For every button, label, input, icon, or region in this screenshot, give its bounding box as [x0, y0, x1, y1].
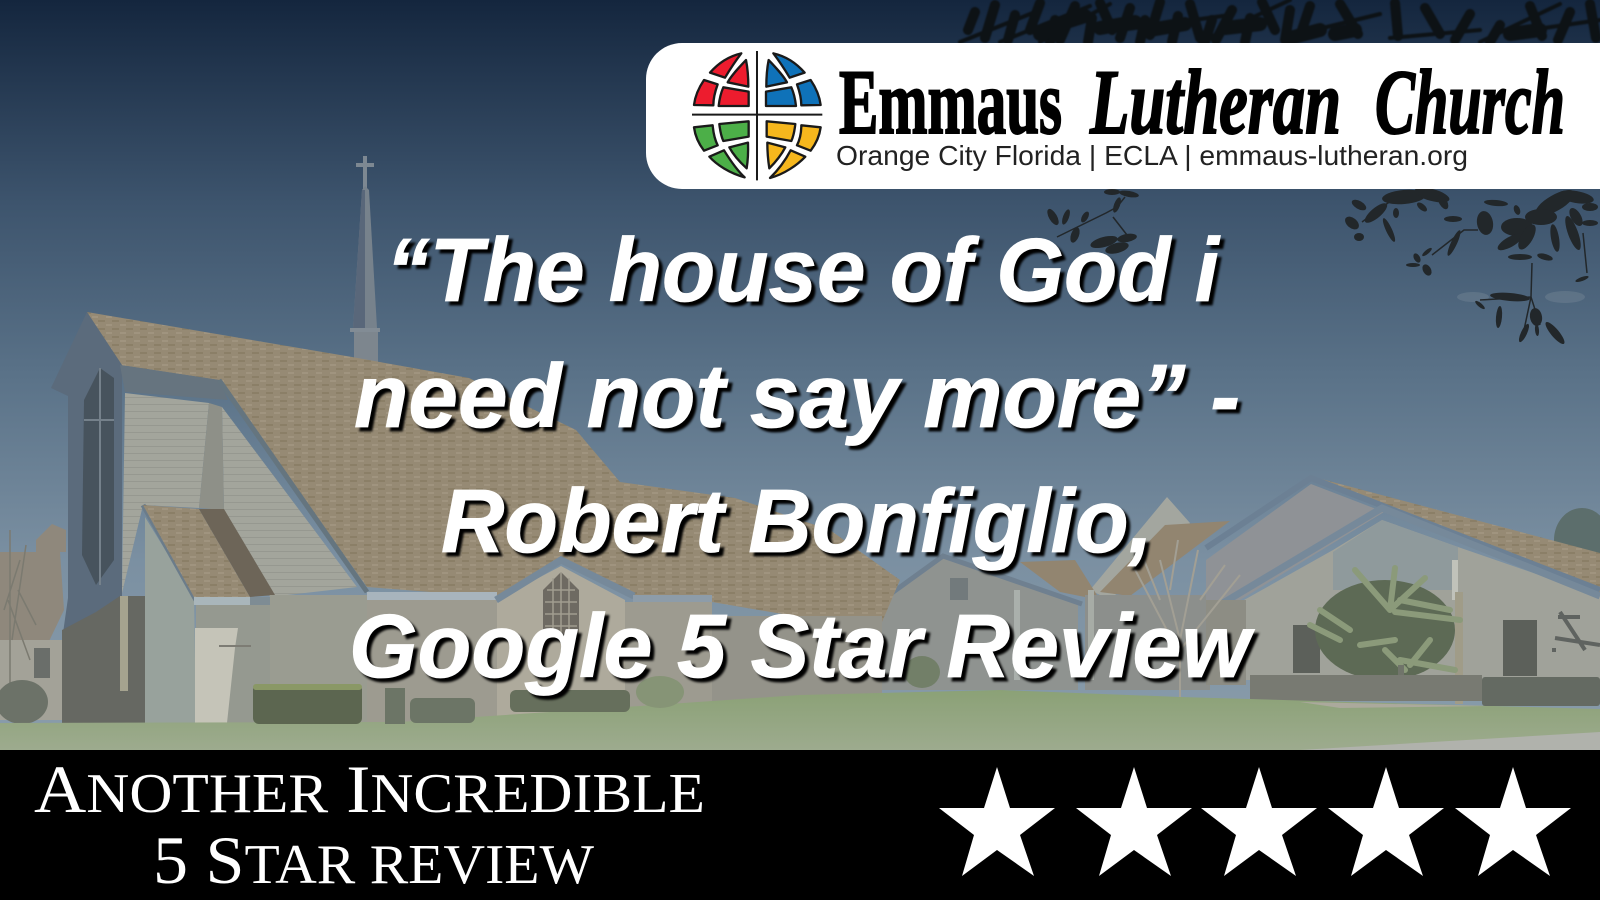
review quote: Google 5 Star Review [349, 597, 1255, 697]
logo panel [646, 43, 1600, 189]
left cluster leaves [1119, 189, 1139, 199]
foliage: top strip [960, 0, 1600, 42]
twigs [1057, 197, 1587, 330]
shrubs [253, 656, 1600, 724]
tree line right [1554, 508, 1600, 572]
star 2 [1076, 767, 1192, 876]
right fellowship hall [1206, 476, 1600, 704]
entry wing with small gable [143, 505, 275, 723]
hanging cluster leaves [1490, 291, 1530, 303]
small twig leaves [1421, 247, 1433, 257]
tower frame [51, 312, 122, 723]
star 4 [1328, 767, 1444, 876]
review quote: need not say more” - [354, 347, 1240, 447]
review quote: “The house of God i [386, 221, 1221, 321]
church spire with cross [350, 156, 380, 368]
palm tree [1310, 568, 1460, 700]
white rounded banner [646, 43, 1600, 189]
church name: Emmaus [839, 51, 1062, 153]
five star rating [939, 767, 1571, 876]
bell tower [51, 312, 367, 723]
church name [839, 51, 1565, 153]
far right middle building [878, 497, 1230, 690]
main church wall with gable and stained glass [270, 560, 882, 723]
tower siding [122, 393, 209, 593]
right canopy leaves [1444, 216, 1462, 222]
church subtitle: Orange City Florida | ECLA | emmaus-lutheran.org [836, 140, 1468, 171]
tower window [82, 368, 114, 585]
bottom black banner [0, 750, 1600, 900]
foliage: branches and leaves under logo [1045, 185, 1598, 346]
bare tree [1130, 540, 1240, 700]
banner heading [34, 751, 705, 898]
review quote [349, 221, 1255, 697]
hedge base right [1250, 675, 1482, 701]
main roof [87, 312, 900, 622]
star 5 [1455, 767, 1571, 876]
star 1 [939, 767, 1055, 876]
review quote: Robert Bonfiglio, [441, 472, 1153, 572]
stone base [62, 596, 148, 723]
left background building [0, 524, 66, 724]
icon: ELCA cross globe [692, 51, 822, 180]
banner heading: 5 STAR REVIEW [153, 822, 594, 898]
banner heading: ANOTHER INCREDIBLE [34, 751, 705, 827]
church name: Lutheran [1089, 51, 1341, 153]
cloud wisps [1457, 291, 1585, 303]
lawn [0, 690, 1600, 750]
star 3 [1201, 767, 1317, 876]
middle cluster leaves [1381, 188, 1427, 206]
